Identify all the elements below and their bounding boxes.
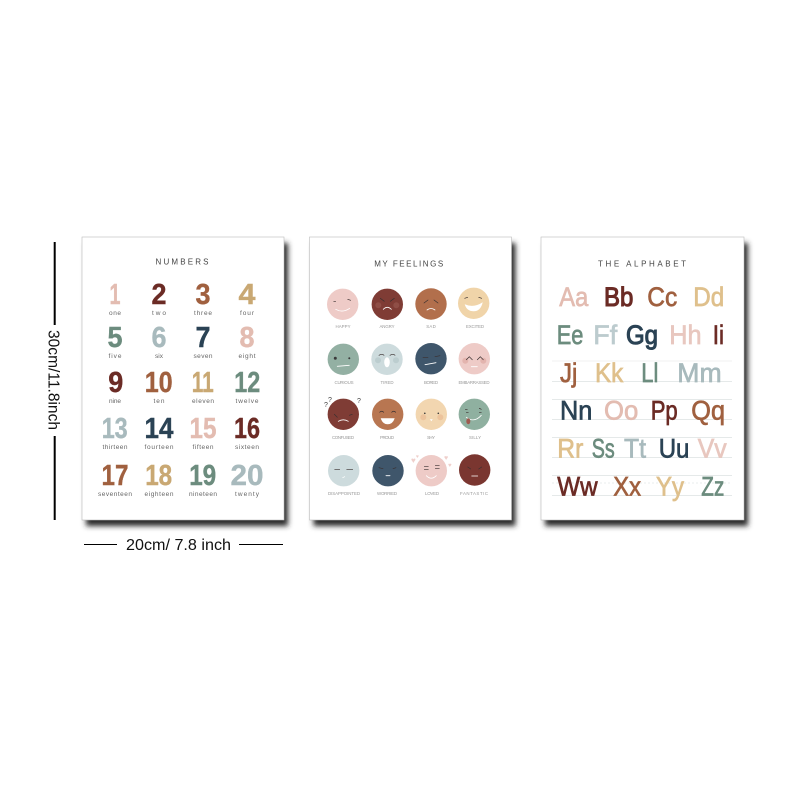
heading: numbers: NUMBERS <box>156 258 208 266</box>
feeling labels: ANGRY <box>380 324 395 329</box>
feeling labels: CURIOUS <box>334 380 354 385</box>
number grid: 19 <box>189 460 216 492</box>
number grid: 8 <box>240 322 254 354</box>
icons: hearts: ♥ <box>411 456 416 465</box>
alphabet letters: Bb <box>604 282 633 312</box>
alphabet letters: Ff <box>593 320 618 350</box>
alphabet letters: Hh <box>669 320 702 350</box>
alphabet letters: Kk <box>595 358 624 388</box>
alphabet letters: Nn <box>560 396 592 426</box>
number word labels: two <box>152 310 166 317</box>
number grid: 12 <box>234 367 260 399</box>
icons: confused question marks: ? <box>357 398 361 405</box>
number word labels: twelve <box>236 398 259 405</box>
number grid: 18 <box>145 460 172 492</box>
icons: hearts: ♥ <box>416 454 419 460</box>
feeling labels: DISAPPOINTED <box>328 491 360 496</box>
number word labels: five <box>108 353 122 360</box>
feeling labels: TIRED <box>380 380 394 385</box>
alphabet letters: Ww <box>557 472 598 502</box>
number grid: 15 <box>190 413 216 445</box>
face: shy <box>416 399 447 430</box>
face: loved <box>416 455 447 486</box>
alphabet letters: Cc <box>647 282 677 312</box>
alphabet letters: Ii <box>713 320 724 350</box>
number word labels: eighteen <box>144 491 174 498</box>
alphabet letters: Qq <box>691 396 725 426</box>
number word labels: nine <box>109 398 121 405</box>
panel: numbers poster <box>82 237 288 526</box>
face: excited <box>458 288 489 319</box>
feeling labels <box>328 324 490 496</box>
alphabet letters: Xx <box>613 472 641 502</box>
number word labels <box>98 310 260 498</box>
number word labels: twenty <box>235 491 260 498</box>
icons: hearts <box>411 454 452 469</box>
alphabet letters: Dd <box>693 282 724 312</box>
alphabet letters: Pp <box>651 396 678 426</box>
alphabet letters: Vv <box>698 434 727 464</box>
face: bored <box>415 343 447 374</box>
feeling labels: SILLY <box>469 435 481 440</box>
height dimension: 30cm/11.8inch <box>44 330 62 430</box>
feeling labels: FANTASTIC <box>460 491 488 496</box>
heading: the alphabet: THE ALPHABET <box>598 260 686 268</box>
feeling labels: BORED <box>424 380 438 385</box>
number grid: 7 <box>196 322 210 354</box>
face: silly <box>459 399 490 430</box>
face: worried <box>372 455 404 486</box>
feeling labels: HAPPY <box>336 324 351 329</box>
icons: confused question marks <box>324 397 361 409</box>
number grid: 10 <box>145 367 173 399</box>
alphabet letters: Ll <box>641 358 658 388</box>
number grid: 2 <box>152 279 166 311</box>
feeling labels: CONFUSED <box>332 435 354 440</box>
alphabet letters <box>557 282 727 502</box>
feeling labels: SAD <box>426 324 436 329</box>
feeling labels: EMBARRASSED <box>458 380 490 385</box>
number word labels: one <box>109 310 121 317</box>
panel: feelings poster <box>310 237 516 526</box>
number word labels: seventeen <box>98 491 132 498</box>
face: fantastic <box>459 454 490 486</box>
number grid: 20 <box>230 460 264 492</box>
face: sad <box>415 288 447 320</box>
feeling labels: PROUD <box>380 435 394 440</box>
number word labels: sixteen <box>235 444 259 451</box>
face: proud <box>372 399 403 430</box>
number grid <box>102 279 264 492</box>
number word labels: fifteen <box>192 444 214 451</box>
number grid: 13 <box>102 413 128 445</box>
face: curious <box>328 344 359 375</box>
number word labels: seven <box>194 353 213 360</box>
number grid: 11 <box>192 367 214 399</box>
alphabet letters: Gg <box>626 320 658 350</box>
icons: confused question marks: ? <box>328 397 332 404</box>
feeling labels: SHY <box>427 435 435 440</box>
number word labels: six <box>155 353 164 360</box>
number word labels: thirteen <box>102 444 128 451</box>
alphabet letters: Yy <box>656 472 684 502</box>
number grid: 6 <box>152 322 166 354</box>
number word labels: three <box>194 310 212 317</box>
feeling labels: WORRIED <box>377 491 397 496</box>
number word labels: nineteen <box>189 491 217 498</box>
alphabet letters: Aa <box>559 282 589 312</box>
face: confused <box>328 399 359 430</box>
alphabet letters: Rr <box>557 434 583 464</box>
face: angry <box>372 289 403 320</box>
face: embarrassed <box>459 343 490 374</box>
face: tired <box>371 344 403 375</box>
number grid: 4 <box>238 279 256 311</box>
number grid: 1 <box>110 279 120 311</box>
number grid: 3 <box>196 279 210 311</box>
alphabet letters: Uu <box>659 434 689 464</box>
feeling labels: LOVED <box>425 491 439 496</box>
number grid: 5 <box>108 322 122 354</box>
alphabet letters: Zz <box>701 472 724 502</box>
number word labels: eleven <box>192 398 214 405</box>
alphabet letters: Jj <box>560 358 577 388</box>
alphabet letters: Tt <box>624 434 646 464</box>
number word labels: four <box>240 310 255 317</box>
face: happy <box>327 289 358 320</box>
icons: confused question marks: ? <box>324 402 328 409</box>
number word labels: ten <box>154 398 165 405</box>
width dimension: 20cm/ 7.8 inch <box>126 537 231 554</box>
number grid: 17 <box>102 460 128 492</box>
alphabet letters: Ee <box>557 320 583 350</box>
icons: hearts: ♥ <box>444 455 448 462</box>
alphabet letters: Ss <box>592 434 615 464</box>
number grid: 9 <box>108 367 123 399</box>
alphabet letters: Mm <box>677 358 722 388</box>
alphabet letters: Oo <box>604 396 638 426</box>
number grid: 16 <box>234 413 260 445</box>
face: disappointed <box>328 455 359 486</box>
feeling labels: EXCITED <box>466 324 484 329</box>
number word labels: fourteen <box>144 444 174 451</box>
handwriting guide lines <box>552 361 732 496</box>
icons: hearts: ♥ <box>448 463 452 469</box>
panel: alphabet poster <box>541 237 748 526</box>
number grid: 14 <box>144 413 174 445</box>
number word labels: eight <box>238 353 256 360</box>
heading: my feelings: MY FEELINGS <box>374 260 443 268</box>
